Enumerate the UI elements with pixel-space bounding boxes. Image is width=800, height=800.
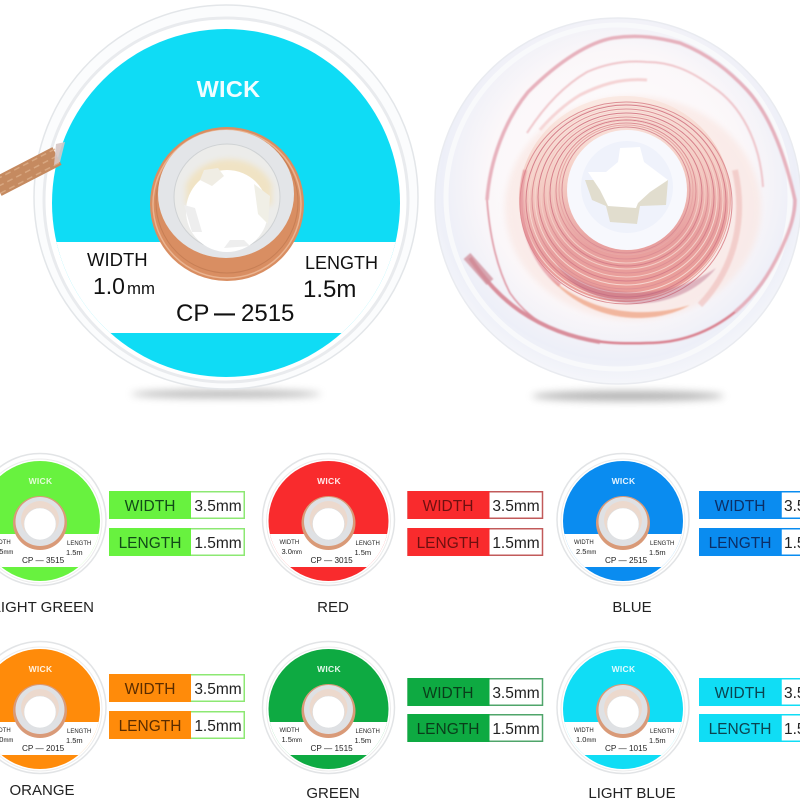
spool: red: 3.0mm: [282, 547, 302, 556]
spool: blue: 2.5mm: [576, 547, 596, 556]
size table: light blue: WIDTH: [715, 685, 765, 702]
spool: light green: WICK: [29, 476, 53, 486]
copper hub: [150, 127, 304, 281]
large spool: clear back view with coil: [435, 18, 800, 401]
size table: orange: LENGTH: [119, 718, 181, 735]
size table: red: 3.5mm: [492, 498, 540, 515]
spool: green: LENGTH: [356, 729, 380, 735]
spool: light blue: WICK: [612, 664, 636, 674]
spool: green: CP — 1515: [310, 744, 353, 753]
size table: green: 3.5mm: [492, 685, 540, 702]
size table: orange: 3.5mm: [194, 681, 242, 698]
hub hole: [585, 147, 668, 224]
spool: light green: [0, 454, 106, 586]
white label band: [56, 242, 396, 333]
size table: red: LENGTH: [417, 535, 479, 552]
size table: orange: [109, 674, 244, 739]
size table: green: LENGTH: [417, 721, 479, 738]
spool: light blue: CP — 1015: [605, 744, 648, 753]
spool: red: WIDTH: [280, 540, 299, 546]
size table: orange: 1.5mm: [194, 718, 242, 735]
spool: blue: LENGTH: [650, 541, 674, 547]
spool: light blue: [557, 642, 689, 774]
spool shadow: [131, 390, 321, 398]
size table: blue: LENGTH: [709, 535, 771, 552]
caption: blue: BLUE: [612, 599, 652, 616]
spool: orange: CP — 2015: [22, 744, 65, 753]
spool: green: [262, 642, 394, 774]
WICK heading: WICK: [197, 76, 260, 102]
copper strand: [0, 142, 65, 195]
clear case: [435, 18, 800, 384]
spool: light blue: WIDTH: [574, 728, 594, 734]
spool: blue: WICK: [612, 476, 636, 486]
spool: red: CP — 3015: [310, 556, 353, 565]
model number: —: [214, 302, 235, 325]
spool: red: WICK: [317, 476, 341, 486]
size table: light green: 3.5mm: [194, 498, 242, 515]
spool: light blue: 1.0mm: [576, 735, 596, 744]
size table: red: 1.5mm: [492, 535, 540, 552]
width value: 1.0mm: [93, 273, 155, 299]
spool: blue: WIDTH: [574, 540, 594, 546]
spool: blue: CP — 2515: [605, 556, 648, 565]
caption: orange: ORANGE: [9, 782, 75, 799]
size table: red: [408, 491, 542, 556]
size table: orange: WIDTH: [125, 681, 175, 698]
spool: red: [262, 454, 394, 586]
length value: 1.5m: [303, 276, 356, 303]
spool: orange: WICK: [29, 664, 53, 674]
spool: green: WICK: [317, 664, 341, 674]
spool shadow: [532, 391, 724, 401]
size table: light green: 1.5mm: [194, 535, 242, 552]
LENGTH label: LENGTH: [305, 253, 378, 273]
spool: light green: 1.5m: [66, 548, 83, 557]
spool: orange: [0, 642, 106, 774]
spool: light blue: 1.5m: [649, 736, 666, 745]
size table: light blue: [699, 678, 800, 742]
strand end: [470, 258, 600, 342]
spool: red: 1.5m: [354, 548, 371, 557]
spool: blue: 1.5m: [649, 548, 666, 557]
size table: blue: [699, 491, 800, 556]
size table: light green: [109, 491, 244, 556]
caption: red: RED: [317, 599, 349, 616]
size table: light blue: LENGTH: [709, 721, 771, 738]
spool: green: 1.5m: [354, 736, 371, 745]
spool: light green: CP — 3515: [22, 556, 65, 565]
size table: light green: LENGTH: [119, 535, 181, 552]
loose outer windings: [467, 36, 795, 343]
spool: green: WIDTH: [280, 728, 299, 734]
spool: green: 1.5mm: [282, 735, 302, 744]
clear outer case: [34, 5, 418, 389]
size table: green: WIDTH: [423, 685, 473, 702]
WIDTH label: WIDTH: [87, 249, 148, 270]
spool: orange: LENGTH: [67, 729, 91, 735]
size table: blue: WIDTH: [715, 498, 765, 515]
size table: red: WIDTH: [423, 498, 473, 515]
model number: 2515: [241, 300, 294, 327]
white hub: [567, 130, 687, 250]
cyan label disc: [52, 29, 400, 377]
size table: green: 1.5mm: [492, 721, 540, 738]
spool: light green: LENGTH: [67, 541, 91, 547]
spool: orange: 1.5m: [66, 736, 83, 745]
model number: CP: [176, 300, 209, 327]
spool: red: LENGTH: [356, 541, 380, 547]
spool: light blue: LENGTH: [650, 729, 674, 735]
size table: light green: WIDTH: [125, 498, 175, 515]
main copper coil: [505, 96, 761, 320]
large spool: light blue front view: [0, 5, 420, 398]
gear-shaped hole: [186, 170, 268, 252]
spool: blue: [557, 454, 689, 586]
size table: green: [408, 678, 542, 742]
